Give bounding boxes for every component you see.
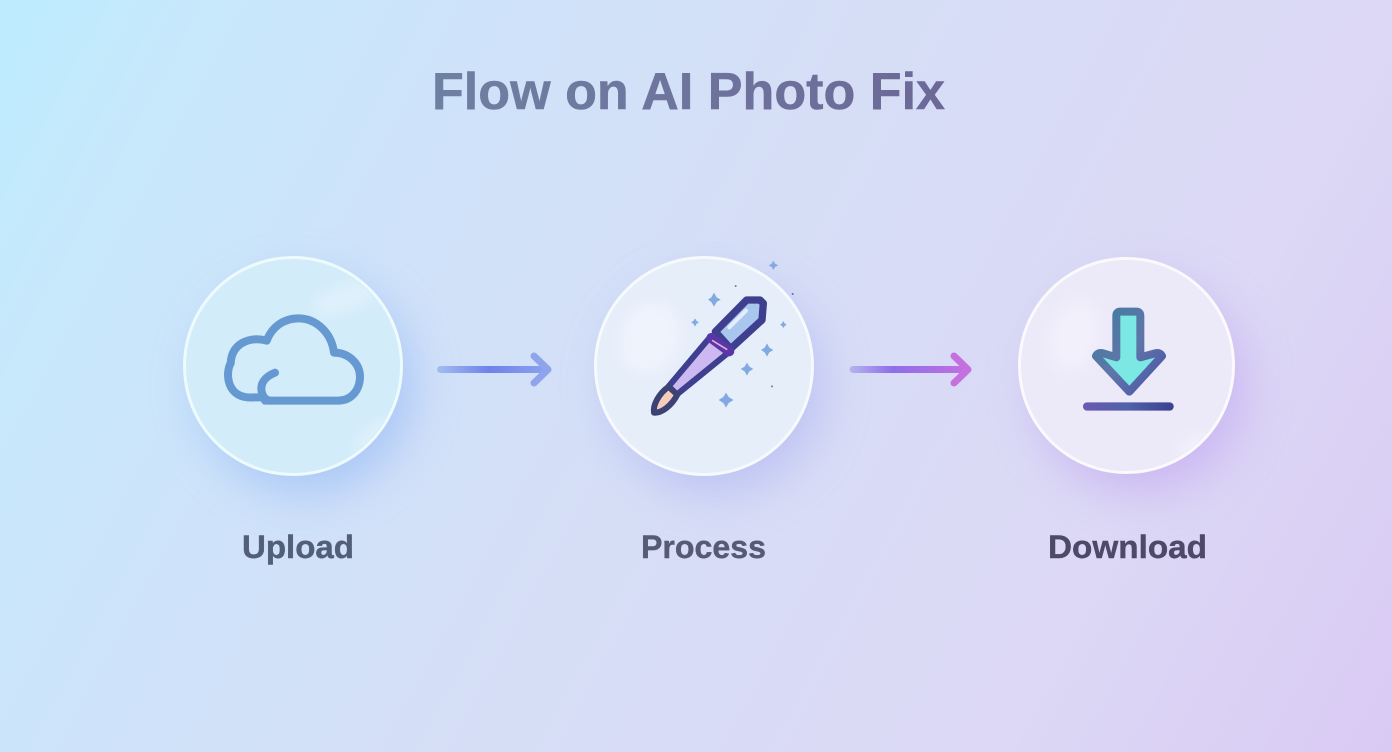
upload circle (184, 258, 402, 474)
download circle (1020, 258, 1234, 472)
process circle (596, 258, 812, 474)
label: download: Download (1048, 529, 1207, 565)
download baseline (1083, 402, 1174, 411)
icon: download arrow (1083, 312, 1174, 411)
arrow: upload to process (440, 356, 548, 383)
icon: magic pen (654, 300, 763, 413)
arrow: process to download (853, 356, 968, 383)
step: upload (184, 258, 412, 565)
label: process: Process (641, 529, 766, 565)
icon: sparkles (691, 261, 794, 408)
step: process (596, 258, 822, 565)
title: Flow on AI Photo Fix (432, 63, 945, 121)
step: download (1020, 258, 1244, 565)
label: upload: Upload (242, 529, 354, 565)
icon: cloud upload (228, 318, 360, 401)
